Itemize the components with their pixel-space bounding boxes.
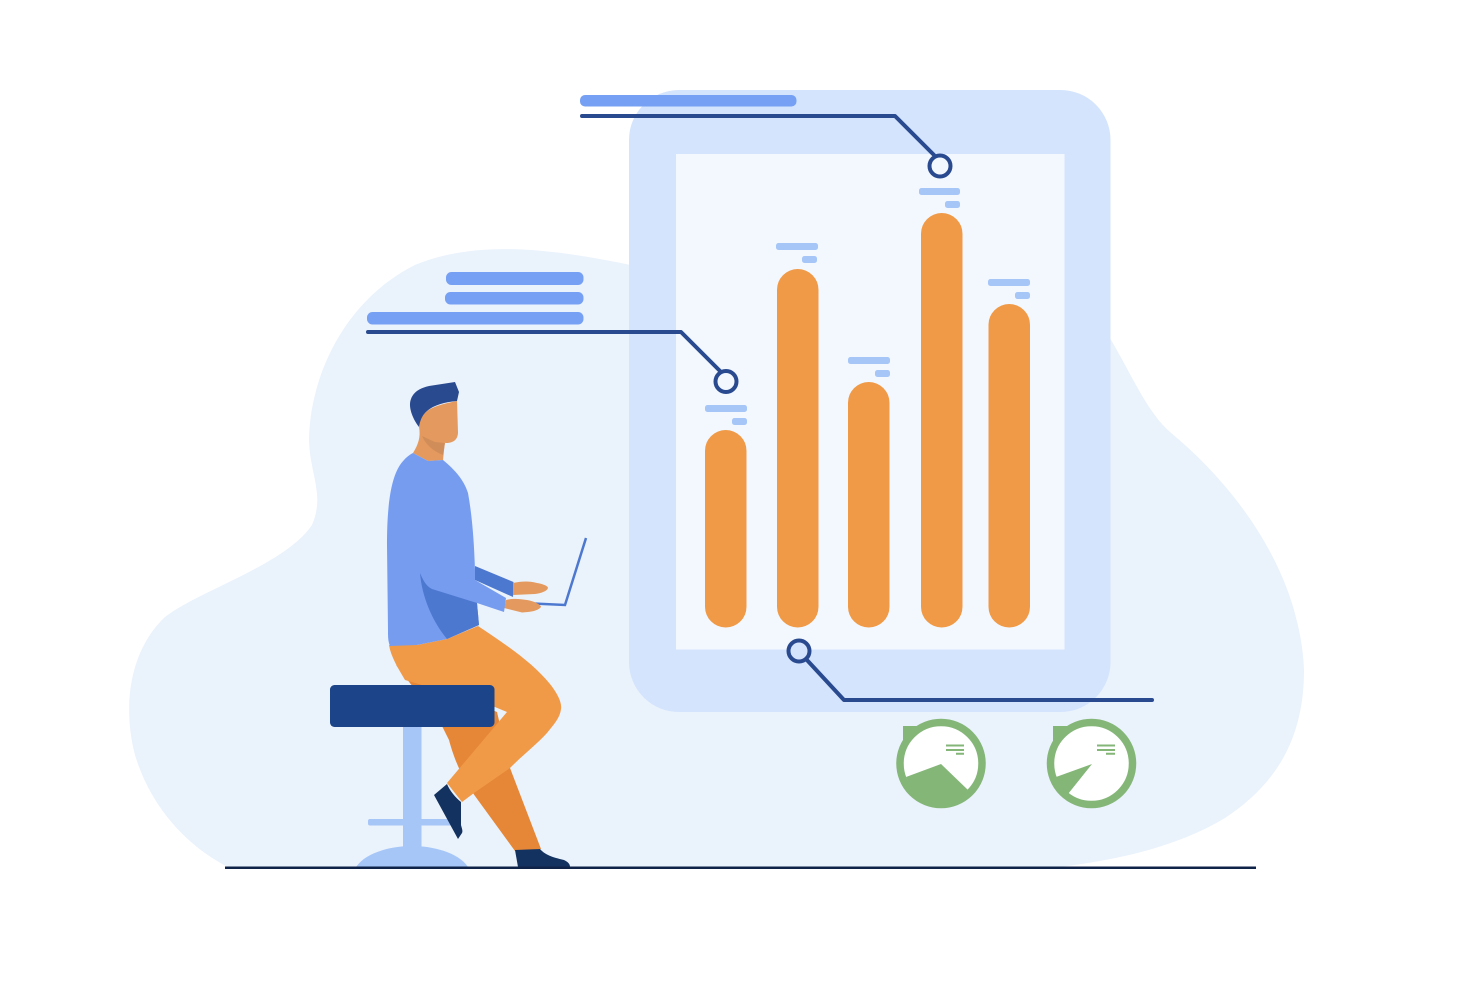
near leg — [389, 626, 561, 802]
bar 4 — [919, 188, 962, 628]
bar chart — [705, 188, 1030, 628]
stool seat — [330, 685, 494, 727]
bar 3 — [848, 357, 890, 628]
neck — [413, 427, 445, 461]
bar 2 — [776, 243, 818, 628]
neck shadow — [422, 436, 445, 455]
raised shoe — [434, 784, 462, 839]
person — [387, 382, 586, 867]
callout: left — [367, 272, 736, 392]
sweater — [387, 453, 506, 646]
upper hand — [513, 582, 548, 595]
face — [419, 401, 458, 443]
laptop — [533, 538, 586, 605]
hair — [410, 382, 459, 427]
bar 1 — [705, 405, 747, 628]
lower hand — [504, 599, 541, 612]
ground line — [225, 866, 1256, 869]
sweater shadow — [420, 573, 479, 639]
gauge: left — [900, 722, 982, 804]
gauge: right — [1050, 722, 1132, 804]
far sleeve — [475, 566, 514, 597]
callout: bottom — [788, 640, 1152, 700]
tablet panel — [629, 90, 1110, 712]
stool — [356, 725, 468, 867]
background blob — [129, 249, 1304, 867]
tablet screen — [676, 154, 1064, 650]
far shoe — [515, 849, 570, 867]
far leg — [396, 665, 541, 851]
callout: top — [580, 95, 950, 176]
bar 5 — [988, 279, 1030, 628]
